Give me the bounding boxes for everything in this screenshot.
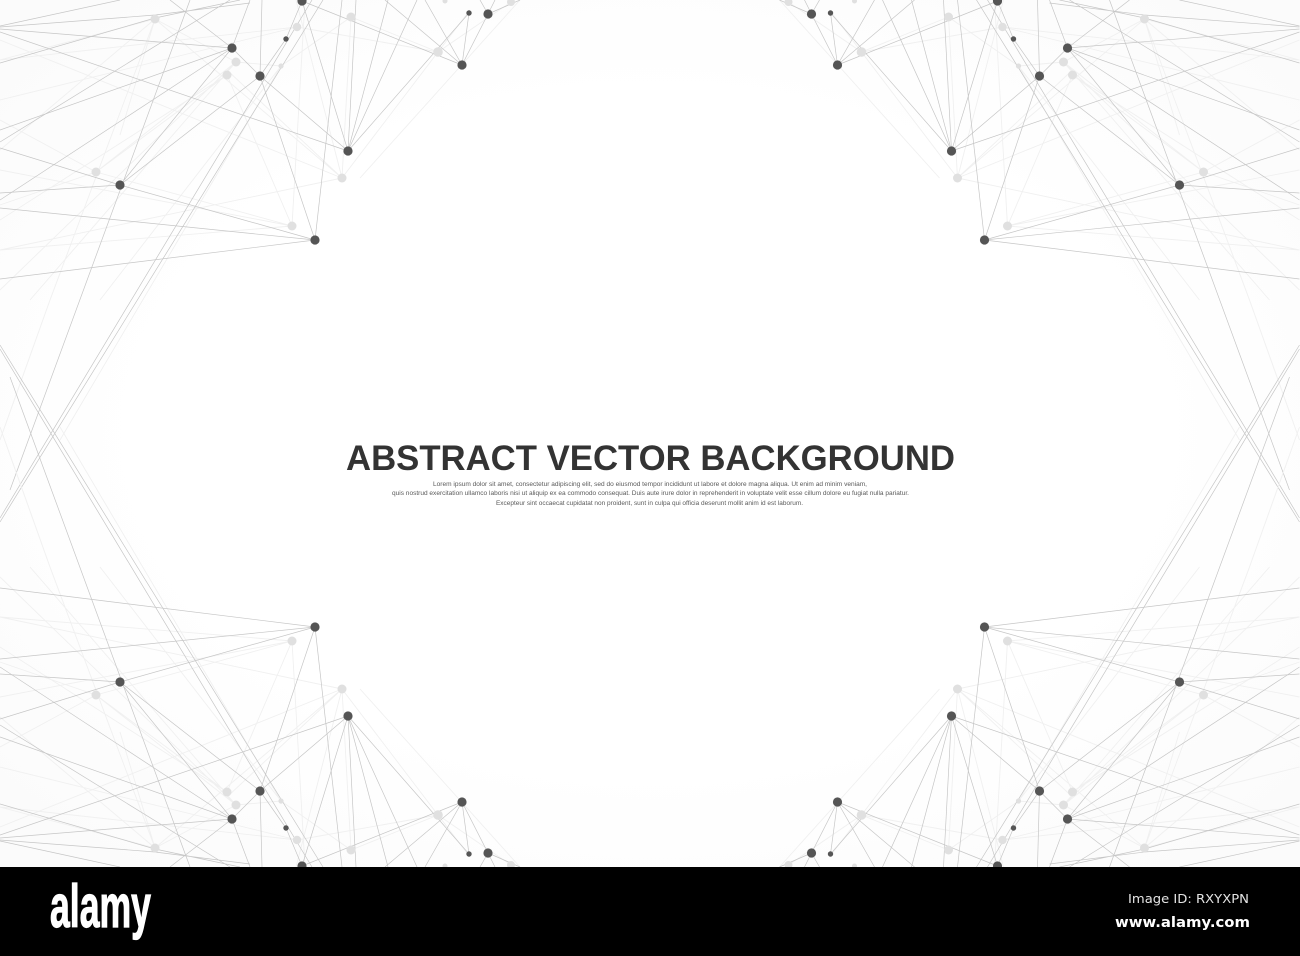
network: top-left quadrant <box>0 0 520 522</box>
body text <box>392 481 909 507</box>
network: bottom-left quadrant <box>0 345 520 871</box>
image id: Image ID: RXYXPN <box>1128 891 1249 906</box>
body text: Lorem ipsum dolor sit amet, consectetur adipiscing elit, sed do eiusmod tempor incididunt ut labore et dolore magna aliqua. Ut enim ad minim veniam, <box>433 481 867 488</box>
body text: Excepteur sint occaecat cupidatat non proident, sunt in culpa qui officia deserunt mollit anim id est laborum. <box>496 500 803 507</box>
network: top-right quadrant <box>780 0 1300 522</box>
website: www.alamy.com <box>1115 915 1250 931</box>
body text: quis nostrud exercitation ullamco laboris nisi ut aliquip ex ea commodo consequat. Duis aute irure dolor in reprehenderit in voluptate velit esse cillum dolore eu fugiat nulla pariatur. <box>392 490 909 497</box>
network: bottom-right quadrant <box>780 345 1300 871</box>
footer bar <box>0 867 1300 956</box>
title: ABSTRACT VECTOR BACKGROUND <box>346 439 955 478</box>
alamy logo: alamy <box>50 873 151 940</box>
